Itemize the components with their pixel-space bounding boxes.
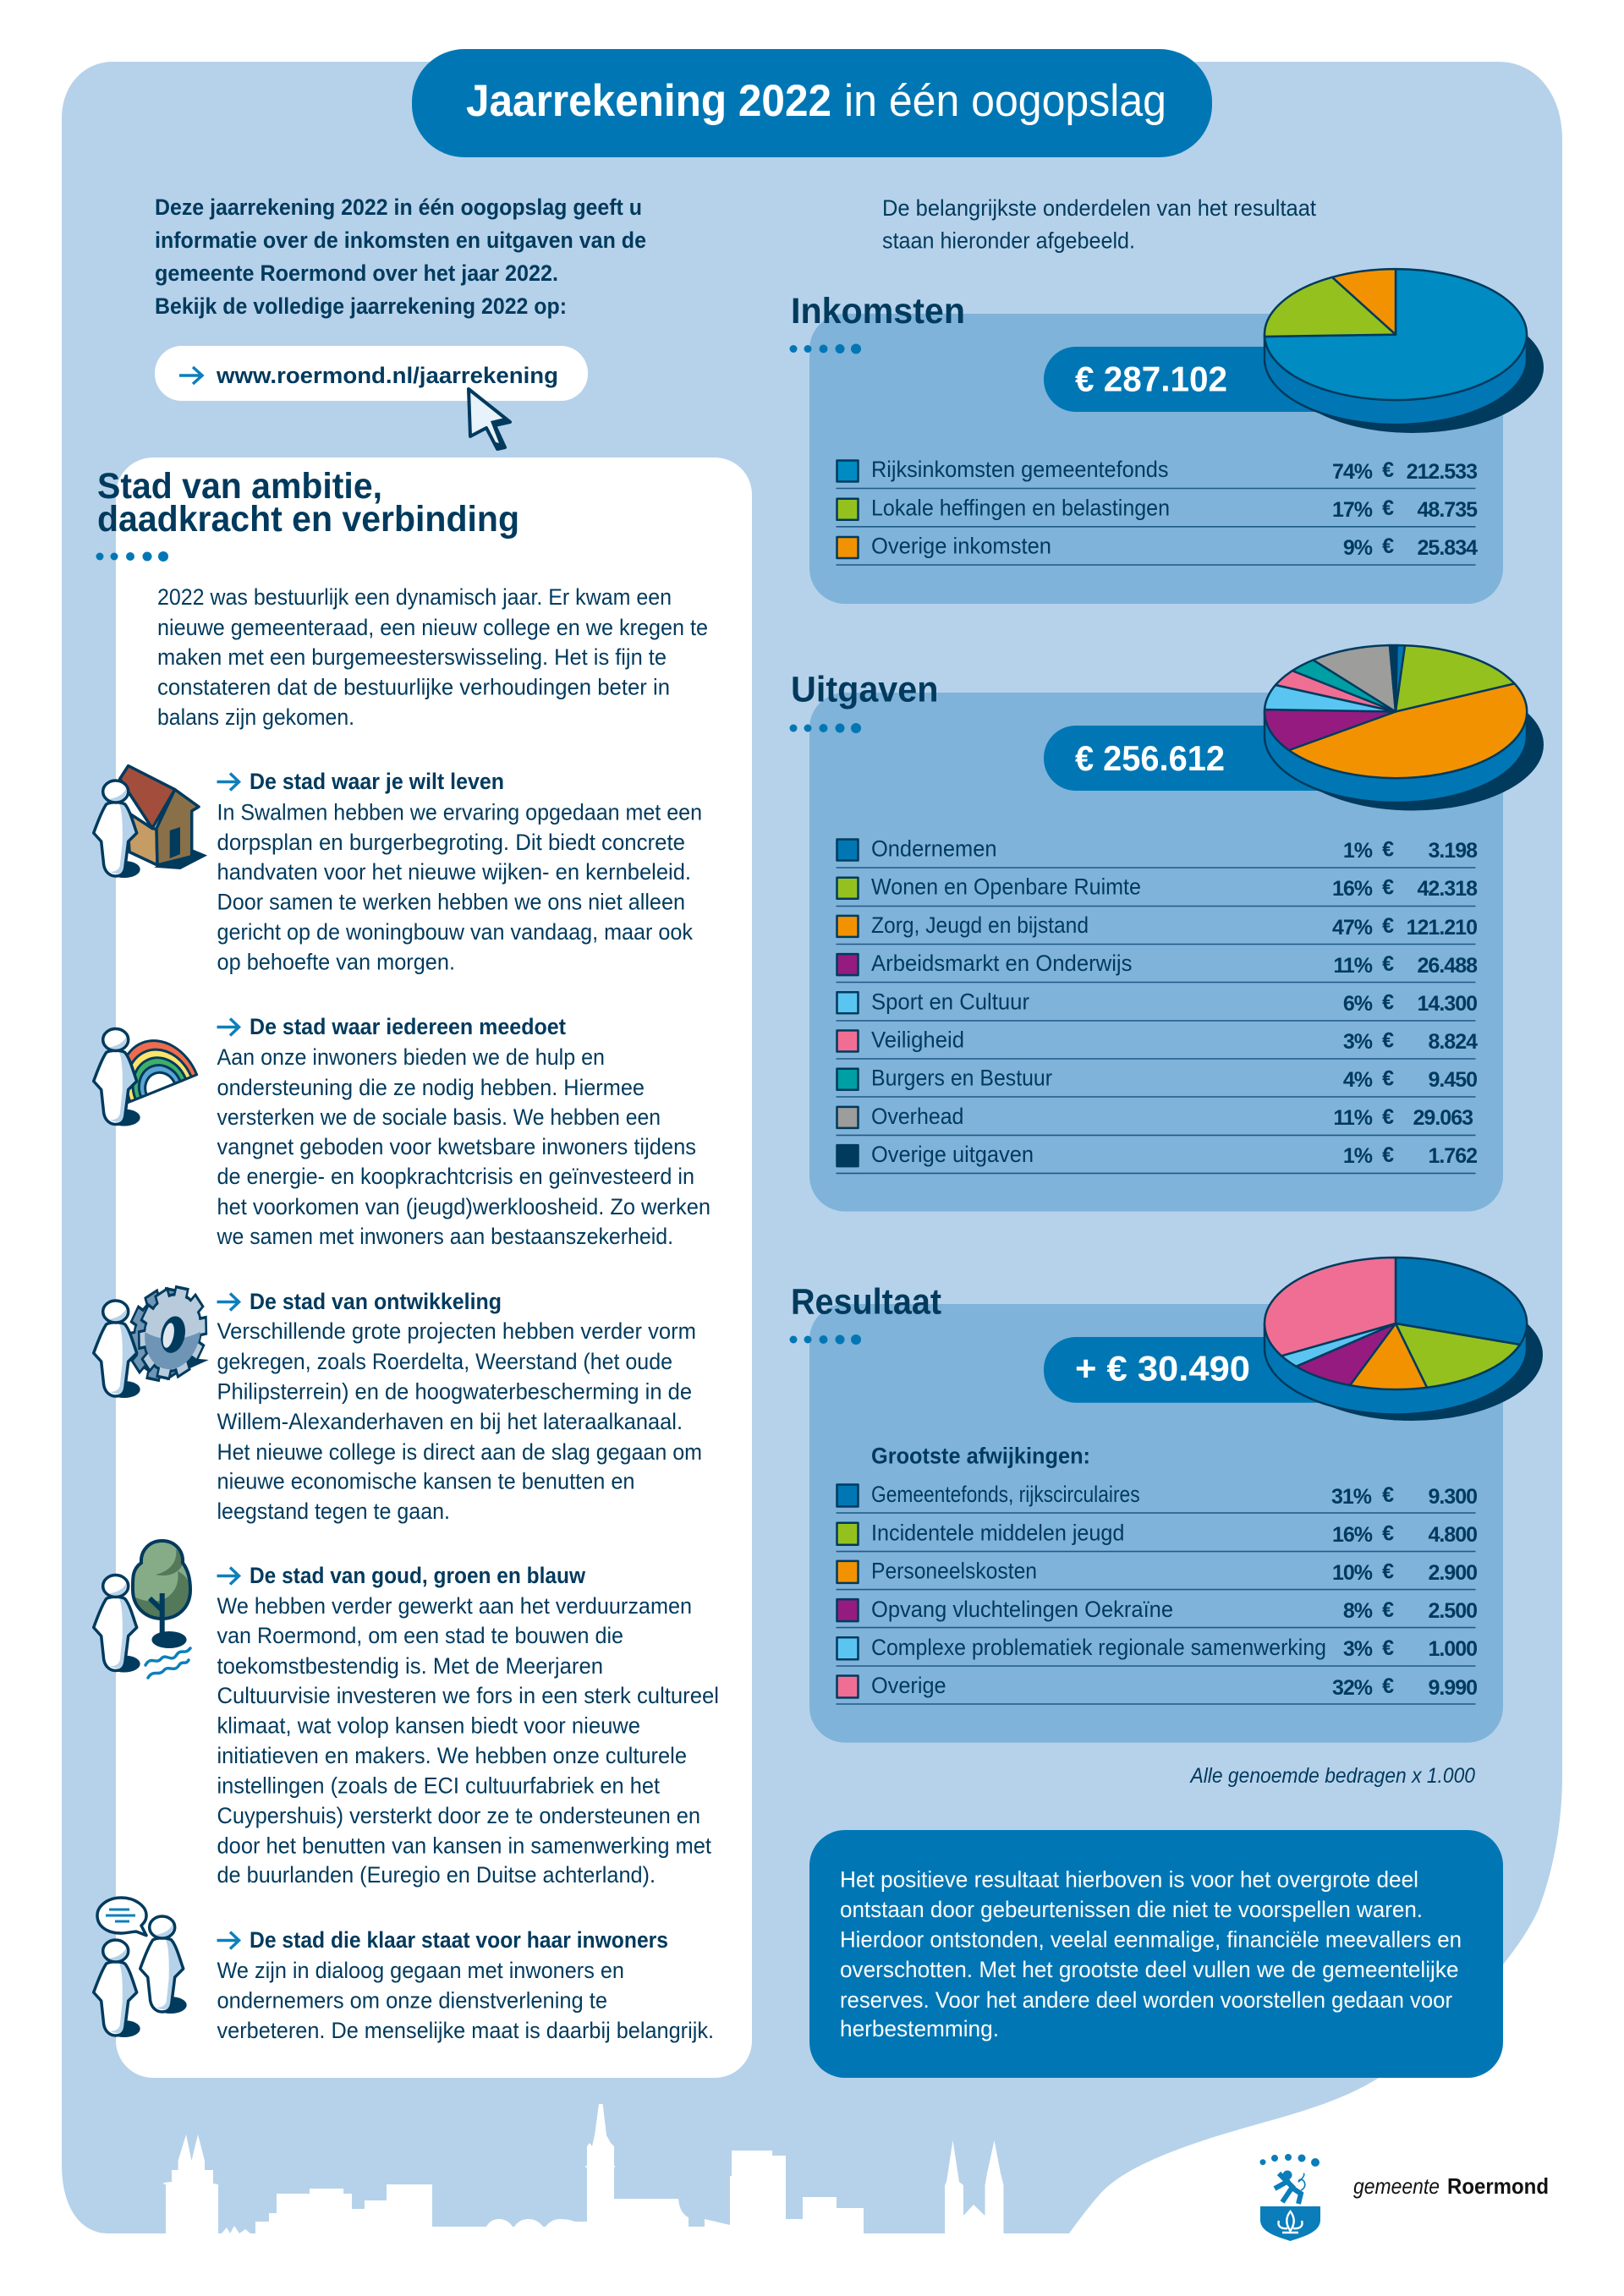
legend: uitgaven: 26.488 bbox=[1418, 954, 1478, 978]
legend: inkomsten: 74% bbox=[1332, 460, 1373, 484]
legend: uitgaven: 4% bbox=[1343, 1068, 1373, 1092]
legend: uitgaven: 14.300 bbox=[1418, 992, 1477, 1016]
section: de stad waar iedereen meedoet: versterken we de sociale basis. We hebben een bbox=[217, 1104, 661, 1130]
heading: uitgaven: Uitgaven bbox=[791, 670, 939, 710]
section: de stad van goud, groen en blauw: door het benutten van kansen in samenwerking met bbox=[217, 1833, 711, 1859]
legend: resultaat: Overige bbox=[871, 1673, 946, 1698]
legend: uitgaven: € bbox=[1382, 990, 1394, 1014]
section: de stad van goud, groen en blauw: klimaat, wat volop kansen biedt voor nieuwe bbox=[217, 1713, 640, 1739]
legend: resultaat: € bbox=[1382, 1598, 1394, 1622]
panel: inkomsten bbox=[790, 269, 1544, 604]
legend: uitgaven: 9.450 bbox=[1428, 1068, 1477, 1092]
legend: uitgaven: 1% bbox=[1343, 839, 1373, 863]
legend: inkomsten: Rijksinkomsten gemeentefonds bbox=[871, 457, 1169, 482]
heading: resultaat: Resultaat bbox=[791, 1281, 941, 1322]
legend: uitgaven: € bbox=[1382, 837, 1394, 861]
text block: introduction: balans zijn gekomen. bbox=[157, 704, 354, 730]
heading: resultaat bbox=[790, 1281, 941, 1345]
footnote: Alle genoemde bedragen x 1.000 bbox=[1189, 1764, 1475, 1788]
legend: uitgaven: € bbox=[1382, 1067, 1394, 1091]
legend: uitgaven: Overhead bbox=[871, 1104, 963, 1129]
section: de stad van ontwikkeling bbox=[217, 1289, 702, 1524]
callout: positive result: ontstaan door gebeurtenissen die niet te voorspellen waren. bbox=[840, 1897, 1423, 1922]
section: de stad van ontwikkeling: Willem-Alexanderhaven en bij het lateraalkanaal. bbox=[217, 1409, 683, 1434]
section: de stad van goud, groen en blauw: van Roermond, om een stad te bouwen die bbox=[217, 1623, 623, 1648]
legend: inkomsten: € bbox=[1382, 496, 1394, 520]
section: de stad die klaar staat voor haar inwoners: ondernemers om onze dienstverlening te bbox=[217, 1987, 607, 2013]
legend: inkomsten: Lokale heffingen en belastingen bbox=[871, 495, 1170, 520]
section: de stad van goud, groen en blauw: initiatieven en makers. We hebben onze culturele bbox=[217, 1743, 687, 1768]
callout: positive result: Hierdoor ontstonden, veelal eenmalige, financiële meevallers en bbox=[840, 1927, 1462, 1953]
intro text: Deze jaarrekening 2022 in één oogopslag geeft u bbox=[155, 195, 642, 220]
section: de stad van ontwikkeling: Verschillende grote projecten hebben verder vorm bbox=[217, 1318, 696, 1344]
legend: uitgaven: Overige uitgaven bbox=[871, 1142, 1034, 1167]
section: de stad van ontwikkeling: gekregen, zoals Roerdelta, Weerstand (het oude bbox=[217, 1349, 672, 1374]
legend: uitgaven: 29.063 bbox=[1413, 1106, 1473, 1130]
heading: stad van ambitie bbox=[96, 466, 519, 562]
callout: positive result: reserves. Voor het andere deel worden voorstellen gedaan voor bbox=[840, 1987, 1452, 2013]
text block: introduction: 2022 was bestuurlijk een dynamisch jaar. Er kwam een bbox=[157, 584, 672, 610]
section: de stad waar je wilt leven: op behoefte van morgen. bbox=[217, 949, 455, 974]
section: de stad van ontwikkeling: leegstand tegen te gaan. bbox=[217, 1499, 450, 1524]
legend: uitgaven: 11% bbox=[1333, 954, 1373, 978]
legend: uitgaven: € bbox=[1382, 1105, 1394, 1129]
legend: uitgaven: € bbox=[1382, 914, 1394, 938]
right column intro text: De belangrijkste onderdelen van het resultaat bbox=[882, 195, 1316, 221]
heading: inkomsten bbox=[790, 291, 965, 353]
section: de stad waar je wilt leven: dorpsplan en burgerbegroting. Dit biedt concrete bbox=[217, 830, 685, 855]
section: de stad van goud, groen en blauw: De stad van goud, groen en blauw bbox=[250, 1563, 586, 1588]
url button: www.roermond.nl/jaarrekening bbox=[216, 363, 558, 388]
section: de stad waar iedereen meedoet: het voorkomen van (jeugd)werkloosheid. Zo werken bbox=[217, 1194, 710, 1219]
section: de stad die klaar staat voor haar inwoners bbox=[217, 1927, 714, 2043]
heading: inkomsten: Inkomsten bbox=[791, 291, 965, 332]
legend: uitgaven: Ondernemen bbox=[871, 836, 996, 861]
legend: uitgaven: 121.210 bbox=[1407, 916, 1477, 940]
legend: resultaat: 8% bbox=[1343, 1599, 1373, 1623]
legend: uitgaven: 1.762 bbox=[1428, 1144, 1477, 1168]
title banner bbox=[412, 49, 1212, 157]
legend: uitgaven: 47% bbox=[1332, 916, 1373, 940]
legend: uitgaven: € bbox=[1382, 1028, 1394, 1052]
panel: resultaat bbox=[790, 1258, 1543, 1743]
legend: resultaat: 32% bbox=[1332, 1676, 1373, 1700]
pie chart: resultaat bbox=[1265, 1258, 1543, 1421]
legend: resultaat: € bbox=[1382, 1483, 1394, 1507]
section: de stad waar iedereen meedoet: ondersteuning die ze nodig hebben. Hiermee bbox=[217, 1075, 645, 1100]
section: de stad van goud, groen en blauw bbox=[217, 1563, 719, 1888]
intro text: informatie over de inkomsten en uitgaven van de bbox=[155, 227, 646, 253]
total pill: inkomsten: € 287.102 bbox=[1075, 359, 1227, 399]
legend: resultaat: 4.800 bbox=[1428, 1523, 1477, 1547]
section: de stad die klaar staat voor haar inwoners: verbeteren. De menselijke maat is daarbij belangrijk. bbox=[217, 2018, 714, 2043]
legend: inkomsten: Overige inkomsten bbox=[871, 534, 1051, 559]
total pill: uitgaven bbox=[1044, 726, 1382, 791]
legend: resultaat: € bbox=[1382, 1560, 1394, 1584]
panel: stad van ambitie bbox=[116, 458, 752, 2078]
section: de stad waar je wilt leven bbox=[217, 769, 702, 974]
legend: inkomsten: 17% bbox=[1332, 498, 1373, 522]
section: de stad van goud, groen en blauw: Cultuurvisie investeren we fors in een sterk cultureel bbox=[217, 1683, 719, 1708]
section: de stad die klaar staat voor haar inwoners: We zijn in dialoog gegaan met inwoners en bbox=[217, 1958, 624, 1983]
callout: positive result: herbestemming. bbox=[840, 2016, 999, 2041]
legend: inkomsten bbox=[836, 457, 1478, 565]
legend: uitgaven: 3% bbox=[1343, 1030, 1373, 1054]
text block: introduction: maken met een burgemeesterswisseling. Het is fijn te bbox=[157, 644, 667, 670]
panel: uitgaven bbox=[790, 645, 1544, 1211]
section: de stad waar je wilt leven: De stad waar je wilt leven bbox=[250, 769, 504, 794]
intro text: gemeente Roermond over het jaar 2022. bbox=[155, 260, 558, 286]
total pill: inkomsten bbox=[1044, 347, 1382, 412]
legend: resultaat: Gemeentefonds, rijkscirculaires bbox=[871, 1482, 1140, 1507]
text block: introduction: nieuwe gemeenteraad, een nieuw college en we kregen te bbox=[157, 615, 708, 640]
legend: resultaat: 9.300 bbox=[1428, 1485, 1477, 1509]
legend: resultaat: € bbox=[1382, 1636, 1394, 1660]
legend: uitgaven: 42.318 bbox=[1418, 877, 1478, 901]
legend: resultaat: 1.000 bbox=[1428, 1637, 1477, 1661]
pie chart: uitgaven bbox=[1265, 645, 1544, 810]
title banner: in één oogopslag bbox=[844, 76, 1166, 126]
legend: resultaat: 2.900 bbox=[1428, 1561, 1477, 1585]
legend: uitgaven: 6% bbox=[1343, 992, 1373, 1016]
section: de stad waar iedereen meedoet: vangnet geboden voor kwetsbare inwoners tijdens bbox=[217, 1134, 696, 1159]
section: de stad van goud, groen en blauw: de buurlanden (Euregio en Duitse achterland). bbox=[217, 1862, 656, 1888]
total pill: uitgaven: € 256.612 bbox=[1075, 738, 1225, 778]
section: de stad van ontwikkeling: nieuwe economische kansen te benutten en bbox=[217, 1469, 634, 1494]
heading: stad van ambitie: Stad van ambitie, bbox=[97, 466, 382, 507]
legend: resultaat: 2.500 bbox=[1428, 1599, 1477, 1623]
legend: resultaat: 10% bbox=[1332, 1561, 1373, 1585]
total pill: resultaat: + € 30.490 bbox=[1075, 1349, 1250, 1389]
heading: stad van ambitie: daadkracht en verbinding bbox=[97, 499, 519, 540]
icon: two people in dialogue bbox=[94, 1898, 187, 2037]
text block: introduction: constateren dat de bestuurlijke verhoudingen beter in bbox=[157, 675, 670, 700]
section: de stad waar iedereen meedoet bbox=[217, 1014, 710, 1249]
legend: resultaat: 9.990 bbox=[1428, 1676, 1477, 1700]
section: de stad van ontwikkeling: De stad van ontwikkeling bbox=[250, 1289, 502, 1314]
callout: positive result: Het positieve resultaat hierboven is voor het overgrote deel bbox=[840, 1867, 1418, 1893]
legend: inkomsten: € bbox=[1382, 534, 1394, 558]
title banner: Jaarrekening 2022 bbox=[466, 76, 831, 126]
section: de stad waar iedereen meedoet: De stad waar iedereen meedoet bbox=[250, 1014, 566, 1039]
legend: resultaat: Personeelskosten bbox=[871, 1559, 1037, 1584]
legend: uitgaven: Zorg, Jeugd en bijstand bbox=[871, 912, 1089, 938]
intro text bbox=[155, 195, 646, 319]
legend: uitgaven: € bbox=[1382, 952, 1394, 976]
section: de stad die klaar staat voor haar inwoners: De stad die klaar staat voor haar inwoners bbox=[250, 1927, 668, 1953]
city skyline bbox=[164, 2104, 1003, 2237]
legend: inkomsten: 212.533 bbox=[1407, 460, 1477, 484]
section: de stad waar je wilt leven: In Swalmen hebben we ervaring opgedaan met een bbox=[217, 800, 702, 825]
intro text: Bekijk de volledige jaarrekening 2022 op: bbox=[155, 293, 567, 319]
logo: gemeente Roermond: gemeente bbox=[1353, 2173, 1440, 2199]
legend: uitgaven: 3.198 bbox=[1428, 839, 1478, 863]
icon: person with house bbox=[94, 766, 206, 878]
legend: resultaat: 31% bbox=[1331, 1485, 1372, 1509]
section: de stad van goud, groen en blauw: Cuypershuis) versterkt door ze te ondersteunen en bbox=[217, 1803, 700, 1828]
legend: resultaat: € bbox=[1382, 1521, 1394, 1545]
icon: person with tree and water bbox=[94, 1541, 190, 1678]
legend: uitgaven: € bbox=[1382, 876, 1394, 900]
icon: person with gear bbox=[94, 1281, 215, 1398]
legend: inkomsten: 9% bbox=[1343, 536, 1373, 560]
total pill: resultaat bbox=[1044, 1337, 1382, 1403]
callout: positive result bbox=[809, 1830, 1503, 2078]
section: de stad van goud, groen en blauw: We hebben verder gewerkt aan het verduurzamen bbox=[217, 1593, 692, 1619]
legend: uitgaven: Wonen en Openbare Ruimte bbox=[871, 874, 1141, 900]
legend: uitgaven: 16% bbox=[1332, 877, 1373, 901]
legend: uitgaven: Veiligheid bbox=[871, 1027, 964, 1052]
legend: resultaat: Grootste afwijkingen: bbox=[871, 1444, 1090, 1469]
legend: uitgaven: Arbeidsmarkt en Onderwijs bbox=[871, 951, 1132, 976]
legend: uitgaven: Burgers en Bestuur bbox=[871, 1066, 1052, 1091]
section: de stad van ontwikkeling: Philipsterrein) en de hoogwaterbescherming in de bbox=[217, 1378, 692, 1404]
legend: inkomsten: 25.834 bbox=[1418, 536, 1478, 560]
legend: resultaat: 3% bbox=[1343, 1637, 1373, 1661]
legend: uitgaven: 1% bbox=[1343, 1144, 1373, 1168]
legend: uitgaven bbox=[836, 836, 1478, 1173]
icon: mouse cursor bbox=[469, 389, 510, 449]
legend: inkomsten: € bbox=[1382, 458, 1394, 482]
section: de stad waar iedereen meedoet: Aan onze inwoners bieden we de hulp en bbox=[217, 1044, 605, 1070]
legend: uitgaven: 8.824 bbox=[1428, 1030, 1478, 1054]
legend: resultaat bbox=[836, 1444, 1477, 1704]
legend: inkomsten: 48.735 bbox=[1418, 498, 1478, 522]
legend: resultaat: Incidentele middelen jeugd bbox=[871, 1520, 1124, 1545]
logo: gemeente Roermond: Roermond bbox=[1447, 2173, 1549, 2199]
section: de stad waar je wilt leven: gericht op de woningbouw van vandaag, maar ook bbox=[217, 919, 693, 945]
right column intro text: staan hieronder afgebeeld. bbox=[882, 228, 1135, 254]
legend: uitgaven: € bbox=[1382, 1143, 1394, 1167]
icon: person with rainbow bbox=[94, 1027, 204, 1126]
legend: uitgaven: 11% bbox=[1333, 1106, 1373, 1130]
right column intro text bbox=[882, 195, 1316, 254]
legend: resultaat: 16% bbox=[1332, 1523, 1373, 1547]
legend: resultaat: € bbox=[1382, 1674, 1394, 1698]
section: de stad waar je wilt leven: handvaten voor het nieuwe wijken- en kernbeleid. bbox=[217, 859, 691, 885]
text block: introduction bbox=[157, 584, 708, 730]
section: de stad waar iedereen meedoet: we samen met inwoners aan bestaanszekerheid. bbox=[217, 1224, 673, 1249]
section: de stad van goud, groen en blauw: toekomstbestendig is. Met de Meerjaren bbox=[217, 1653, 603, 1679]
section: de stad waar iedereen meedoet: de energie- en koopkrachtcrisis en geïnvesteerd in bbox=[217, 1164, 694, 1189]
heading: uitgaven bbox=[790, 670, 939, 733]
logo: gemeente Roermond bbox=[1260, 2154, 1549, 2241]
legend: uitgaven: Sport en Cultuur bbox=[871, 989, 1029, 1014]
callout: positive result: overschotten. Met het grootste deel vullen we de gemeentelijke bbox=[840, 1957, 1458, 1982]
section: de stad van goud, groen en blauw: instellingen (zoals de ECI cultuurfabriek en het bbox=[217, 1773, 660, 1798]
section: de stad van ontwikkeling: Het nieuwe college is direct aan de slag gegaan om bbox=[217, 1439, 702, 1465]
section: de stad waar je wilt leven: Door samen te werken hebben we ons niet alleen bbox=[217, 890, 685, 915]
pie chart: inkomsten bbox=[1265, 269, 1544, 433]
legend: resultaat: Opvang vluchtelingen Oekraïne bbox=[871, 1597, 1173, 1622]
legend: resultaat: Complexe problematiek regionale samenwerking bbox=[871, 1635, 1326, 1660]
url button bbox=[155, 346, 588, 401]
